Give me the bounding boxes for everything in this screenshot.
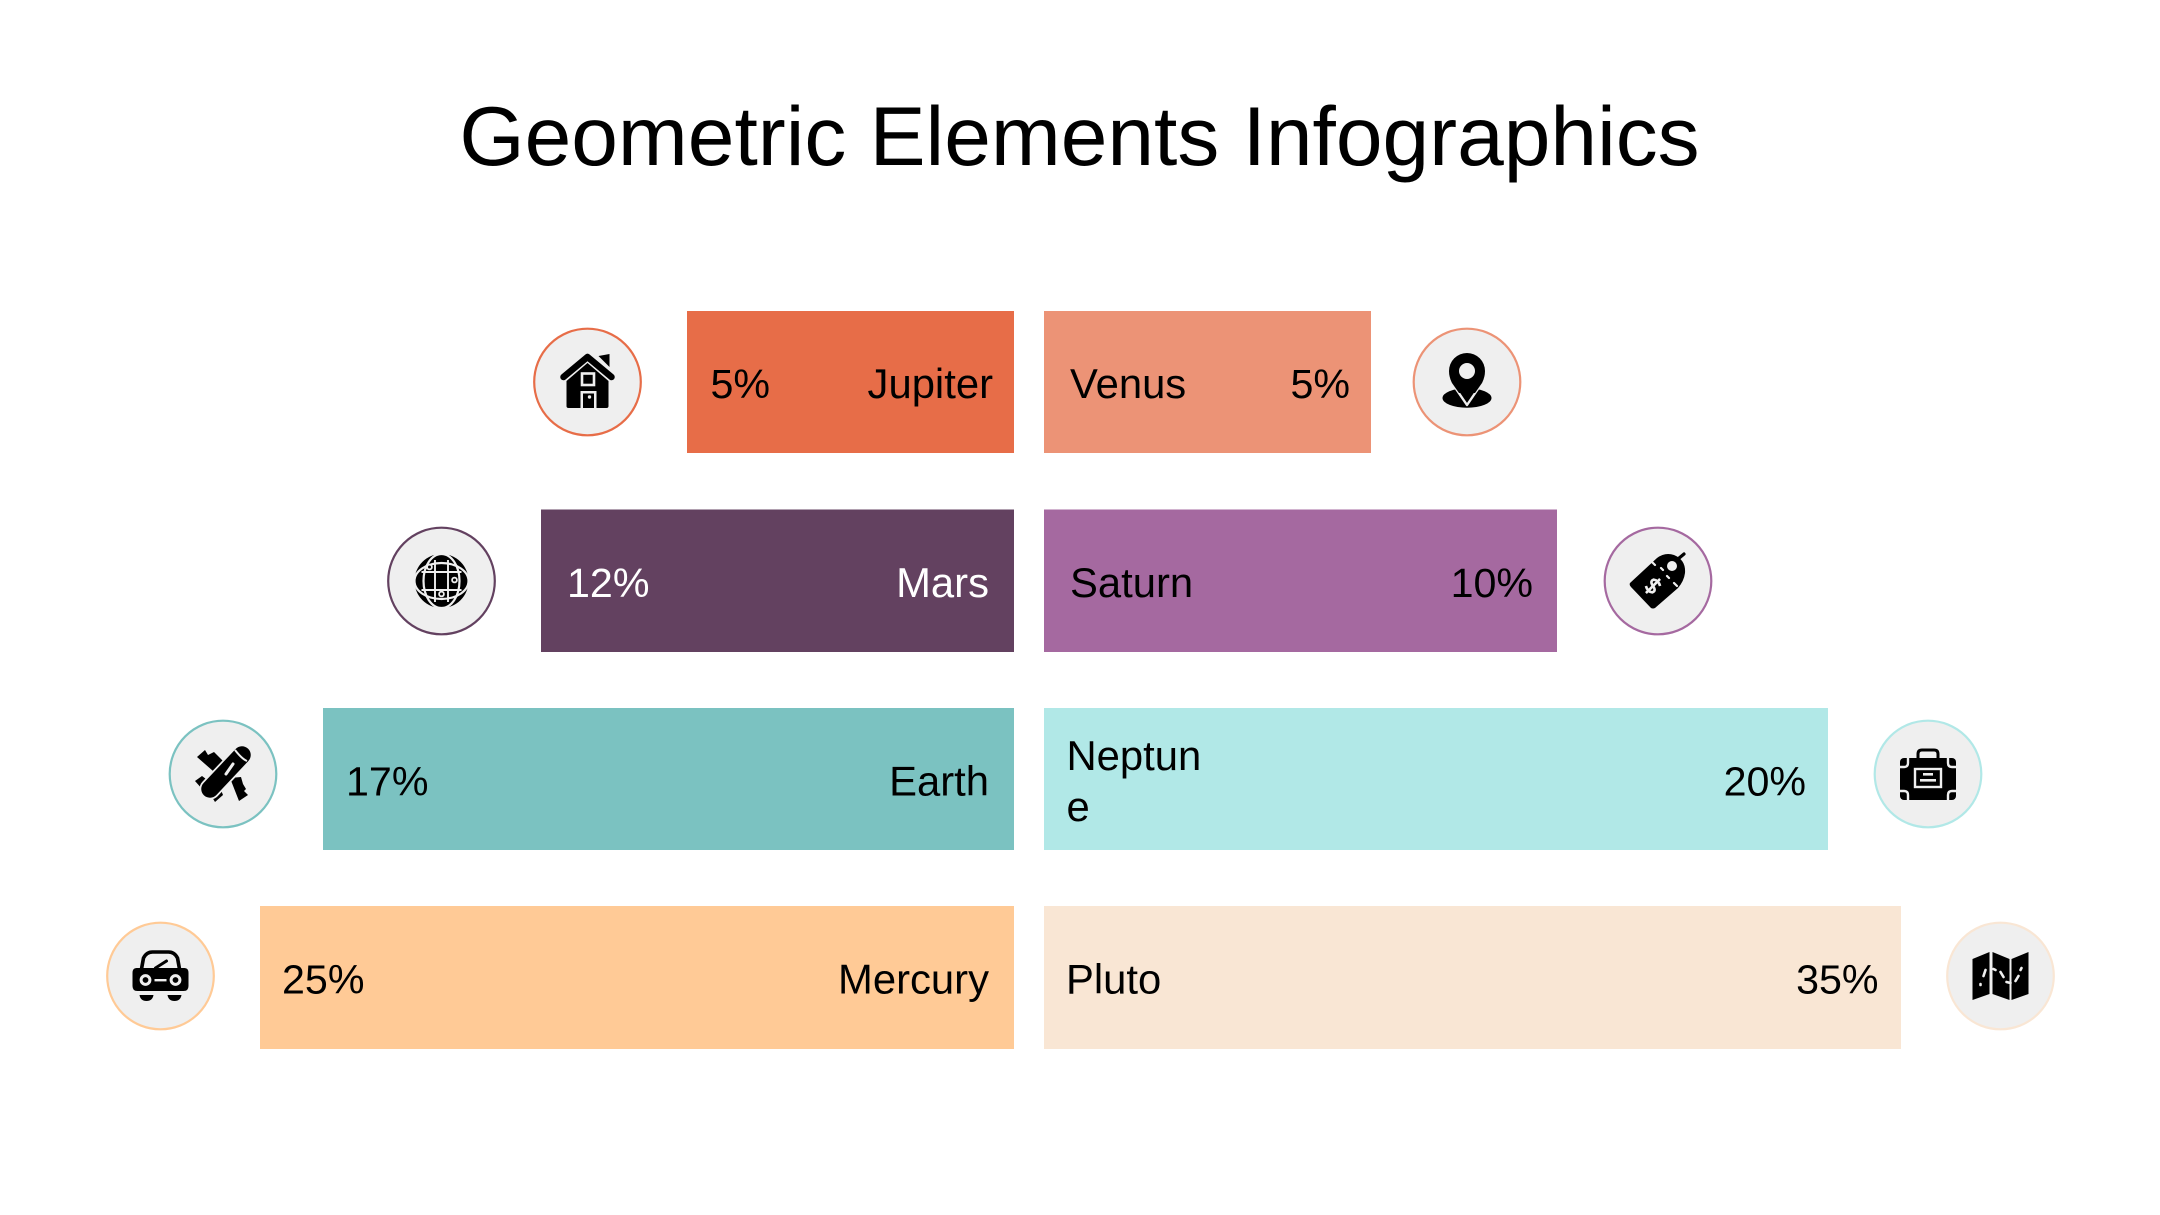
bar: Mercury 25%: Mercury (838, 956, 989, 1002)
bar: Saturn 10%: 10% (1451, 560, 1533, 606)
icon: car (107, 923, 214, 1029)
bar: Neptune 20%: e (1066, 783, 1090, 830)
bar: Neptune 20% (1044, 708, 1828, 850)
bar: Pluto 35%: Pluto (1066, 956, 1161, 1002)
bar: Pluto 35%: 35% (1796, 956, 1878, 1002)
bar: Venus 5%: Venus (1070, 360, 1186, 407)
bar: Jupiter 5% (687, 311, 1014, 453)
bar: Mercury 25%: 25% (282, 956, 364, 1002)
bar: Jupiter 5%: 5% (710, 361, 770, 407)
bar: Saturn 10% (1044, 510, 1557, 652)
icon: suitcase (1875, 721, 1981, 827)
bar: Saturn 10%: Saturn (1070, 559, 1193, 606)
bar: Mars 12%: Mars (896, 559, 989, 606)
icon: airplane (170, 721, 276, 827)
bar: Neptune 20%: Neptun (1066, 732, 1201, 779)
bar: Mars 12% (541, 510, 1014, 652)
icon: globe (388, 528, 495, 634)
bar: Venus 5% (1044, 311, 1371, 453)
bar: Mercury 25% (260, 906, 1014, 1049)
icon: house (534, 329, 641, 435)
bar: Earth 17%: Earth (889, 758, 989, 804)
bar: Venus 5%: 5% (1290, 361, 1350, 407)
bar: Jupiter 5%: Jupiter (868, 360, 993, 407)
icon: price tag (1605, 528, 1711, 634)
bar: Earth 17%: 17% (346, 758, 428, 804)
title: Geometric Elements Infographics (459, 89, 1700, 183)
icon: folded map (1947, 923, 2054, 1029)
bar: Neptune 20%: 20% (1724, 758, 1806, 804)
bar: Pluto 35% (1044, 906, 1901, 1049)
bar: Mars 12%: 12% (567, 560, 649, 606)
bar: Earth 17% (323, 708, 1014, 850)
icon: map pin (1414, 329, 1520, 435)
